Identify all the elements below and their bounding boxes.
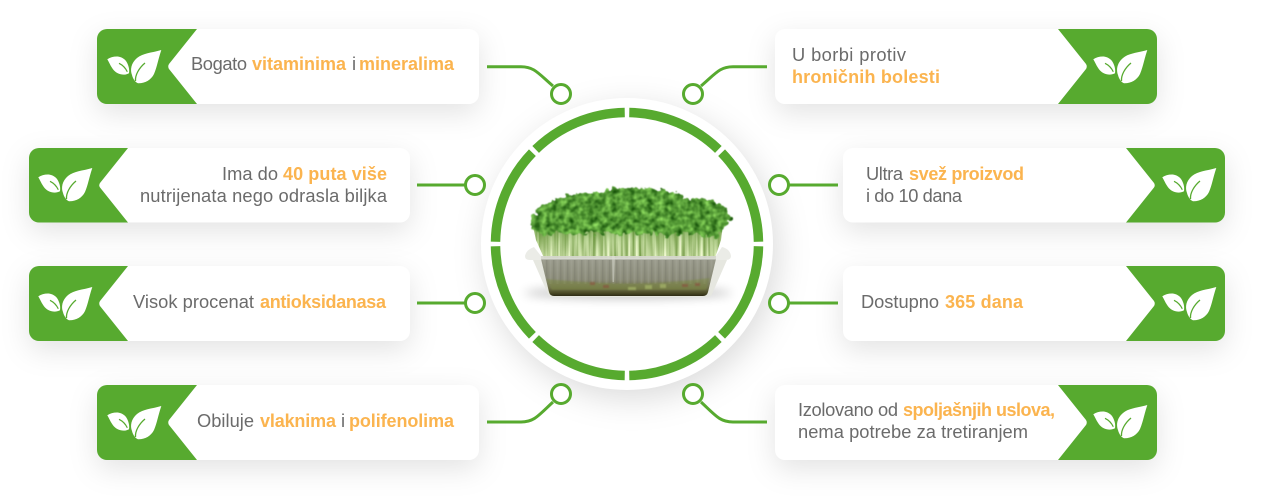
icon: leaves — [1162, 168, 1216, 201]
panel: chronic diseases — [775, 29, 1157, 104]
segmented green ring — [496, 112, 758, 376]
label text: Bogato — [191, 53, 247, 74]
label text: i do 10 dana — [866, 185, 963, 206]
panel: available 365 days — [843, 266, 1225, 341]
central disc — [481, 98, 773, 390]
label text — [798, 399, 1055, 442]
connector: lower middle right — [770, 294, 838, 312]
label text — [792, 44, 940, 87]
connector: bottom right — [684, 384, 767, 422]
panel: isolated from outside conditions — [775, 385, 1157, 460]
connector: bottom left — [487, 384, 570, 422]
label text: nema potrebe za tretiranjem — [798, 421, 1028, 442]
icon: leaves — [107, 406, 161, 439]
label text: svež proizvod — [909, 164, 1024, 184]
label text: 365 dana — [945, 292, 1024, 312]
label text: Visok procenat — [133, 291, 254, 312]
connector: top right — [684, 67, 767, 104]
connector: upper middle left — [417, 176, 484, 194]
label text: Obiluje — [197, 410, 254, 431]
label text: i — [352, 53, 356, 74]
icon: leaves — [38, 287, 92, 320]
label text: Ima do — [222, 163, 278, 184]
label text: i — [341, 410, 345, 431]
panel: nutrients — [29, 148, 410, 222]
icon: leaves — [38, 168, 92, 201]
icon: leaves — [107, 50, 161, 83]
label text — [197, 410, 455, 431]
icon: leaves — [1093, 50, 1147, 83]
label text: 40 puta više — [283, 164, 387, 184]
icon: leaves — [1162, 287, 1216, 320]
label text — [133, 291, 387, 312]
label text — [866, 163, 1024, 206]
panel: vitamins and minerals — [97, 29, 479, 104]
connector: upper middle right — [770, 176, 838, 194]
icon: leaves — [1093, 405, 1147, 438]
label text: spoljašnjih uslova, — [903, 400, 1055, 420]
photo: microgreens in a plastic tray — [524, 188, 732, 299]
label text: hroničnih bolesti — [792, 67, 940, 87]
label text: vitaminima — [252, 54, 347, 74]
label text: mineralima — [359, 54, 455, 74]
label text: nutrijenata nego odrasla biljka — [140, 185, 388, 206]
label text — [861, 291, 1024, 312]
label text: vlaknima — [260, 411, 337, 431]
label text: Izolovano od — [798, 399, 898, 420]
label text — [191, 53, 455, 74]
label text: Ultra — [866, 163, 904, 184]
label text: antioksidanasa — [260, 292, 387, 312]
panel: ultra fresh — [843, 148, 1225, 222]
connector: top left — [487, 67, 570, 104]
label text: U borbi protiv — [792, 44, 907, 65]
connector: lower middle left — [417, 294, 484, 312]
panel: antioxidants — [29, 266, 410, 341]
label text: Dostupno — [861, 291, 939, 312]
panel: fiber and polyphenols — [97, 385, 479, 460]
label text — [140, 163, 388, 206]
label text: polifenolima — [349, 411, 455, 431]
